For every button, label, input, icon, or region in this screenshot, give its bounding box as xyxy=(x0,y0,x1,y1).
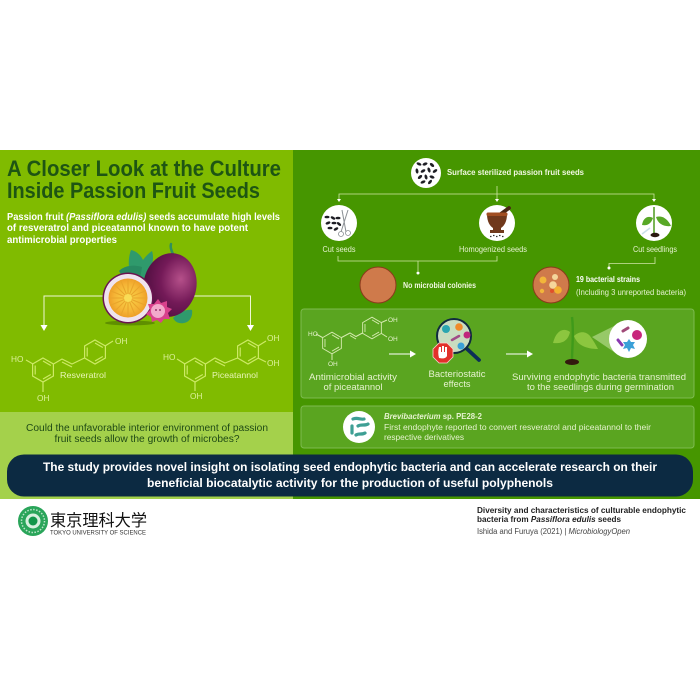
wordmark: english: TOKYO UNIVERSITY OF SCIENCE xyxy=(50,530,147,536)
labels: sample types: Cut seedlings xyxy=(633,244,677,254)
label: bacterial strains: (Including 3 unreported bacteria) xyxy=(576,288,686,297)
panel: left background xyxy=(0,150,293,412)
title: A Closer Look at the Culture xyxy=(7,156,281,181)
label: antimicrobial activity: of piceatannol xyxy=(324,382,382,393)
label: surviving bacteria xyxy=(512,372,686,393)
banner: conclusion xyxy=(7,454,693,496)
banner: conclusion: beneficial biocatalytic activity for the production of useful polyphenols xyxy=(147,478,553,490)
icon: surface sterilized seeds xyxy=(411,158,441,188)
text: Brevibacterium description: respective derivatives xyxy=(384,432,464,442)
chemical structure: piceatannol small: OH xyxy=(328,361,338,368)
arrows: split to three samples xyxy=(337,186,656,202)
strip: lower left band xyxy=(0,455,293,499)
label: bacteriostatic effects xyxy=(428,369,486,390)
icon: seedling xyxy=(636,205,672,241)
text: Brevibacterium description: Brevibacterium sp. PE28-2 xyxy=(384,411,482,421)
flowchart: seed processing xyxy=(321,158,686,303)
citation: Ishida and Furuya (2021) | MicrobiologyOpen xyxy=(477,527,630,536)
icon: seedling with bacteria xyxy=(553,317,647,365)
citation: Diversity and characteristics of culturable endophytic xyxy=(477,505,686,515)
icon: plate with no colonies xyxy=(360,267,396,303)
panel: Brevibacterium xyxy=(301,406,694,448)
label: surviving bacteria: Surviving endophytic bacteria transmitted xyxy=(512,372,686,383)
chemical structure: resveratrol: HO xyxy=(11,354,24,364)
panel: question band: fruit seeds allow the growth of microbes? xyxy=(54,434,240,445)
chemical structure: resveratrol: OH xyxy=(115,336,127,346)
label: resveratrol: Resveratrol xyxy=(60,370,106,380)
icon: teal bacteria xyxy=(343,411,375,443)
label: bacterial strains: 19 bacterial strains xyxy=(576,274,640,284)
chemical structure: piceatannol small xyxy=(308,317,398,368)
label: bacteriostatic effects: effects xyxy=(444,379,471,390)
wordmark: 東京理科大学 xyxy=(50,512,147,530)
title xyxy=(7,156,281,203)
arrow: seedlings to strains xyxy=(608,257,655,270)
arrow: seeds to no colonies xyxy=(338,256,497,274)
text: Brevibacterium description xyxy=(384,411,651,442)
icon: magnifier with stop sign xyxy=(433,319,479,363)
banner: conclusion: The study provides novel insight on isolating seed endophytic bacteria and can accelerate research on their xyxy=(43,462,658,474)
label: no colonies: No microbial colonies xyxy=(403,280,476,290)
title: Inside Passion Fruit Seeds xyxy=(7,178,260,203)
label: surface sterilized: Surface sterilized passion fruit seeds xyxy=(447,168,585,177)
label: bacteriostatic effects: Bacteriostatic xyxy=(428,369,486,380)
intro text: antimicrobial properties xyxy=(7,235,117,246)
label: antimicrobial activity xyxy=(309,372,397,393)
arrow: activity to effects xyxy=(389,350,416,358)
chemical structure: piceatannol: OH xyxy=(267,333,279,343)
chemical structure: piceatannol small: HO xyxy=(308,331,318,338)
intro text: Passion fruit (Passiflora edulis) seeds accumulate high levels xyxy=(7,212,280,223)
panel: question band: Could the unfavorable interior environment of passion xyxy=(26,423,268,434)
text: Brevibacterium description: First endophyte reported to convert resveratrol and piceatannol to their xyxy=(384,422,651,432)
label: piceatannol: Piceatannol xyxy=(212,370,258,380)
panel: antimicrobial activity xyxy=(301,309,694,398)
labels: sample types: Cut seeds xyxy=(322,244,356,254)
arrow: effects to seedling xyxy=(506,350,533,358)
intro text: of resveratrol and piceatannol known to have potent xyxy=(7,223,249,234)
chemical structure: piceatannol small: OH xyxy=(388,317,398,324)
chemical structure: piceatannol: HO xyxy=(163,352,176,362)
labels: sample types: Homogenized seeds xyxy=(459,244,527,254)
logo: Tokyo University of Science xyxy=(18,506,147,536)
chemical structure: piceatannol: OH xyxy=(267,358,279,368)
icon: cut seeds xyxy=(321,205,357,241)
arrow: fruit to resveratrol xyxy=(40,296,103,331)
icon: university emblem xyxy=(18,506,48,536)
label: bacterial strains xyxy=(576,274,686,297)
icon: plate with colonies xyxy=(533,267,569,303)
panel: right background xyxy=(293,150,700,499)
chemical structure: resveratrol: OH xyxy=(37,393,49,403)
intro text xyxy=(7,212,280,246)
chemical structure: resveratrol xyxy=(11,336,127,403)
icon: passion fruit illustration xyxy=(102,244,202,326)
citation: bacteria from Passiflora edulis seeds xyxy=(477,514,621,524)
chemical structure: piceatannol xyxy=(163,333,279,401)
chemical structure: piceatannol: OH xyxy=(190,391,202,401)
label: antimicrobial activity: Antimicrobial activity xyxy=(309,372,397,383)
icon: mortar and pestle xyxy=(479,205,515,241)
panel: question band xyxy=(0,412,293,455)
chemical structure: piceatannol small: OH xyxy=(388,336,398,343)
arrow: fruit to piceatannol xyxy=(193,296,254,331)
citation xyxy=(477,505,686,536)
labels: sample types xyxy=(322,244,677,254)
label: surviving bacteria: to the seedlings during germination xyxy=(527,382,674,393)
